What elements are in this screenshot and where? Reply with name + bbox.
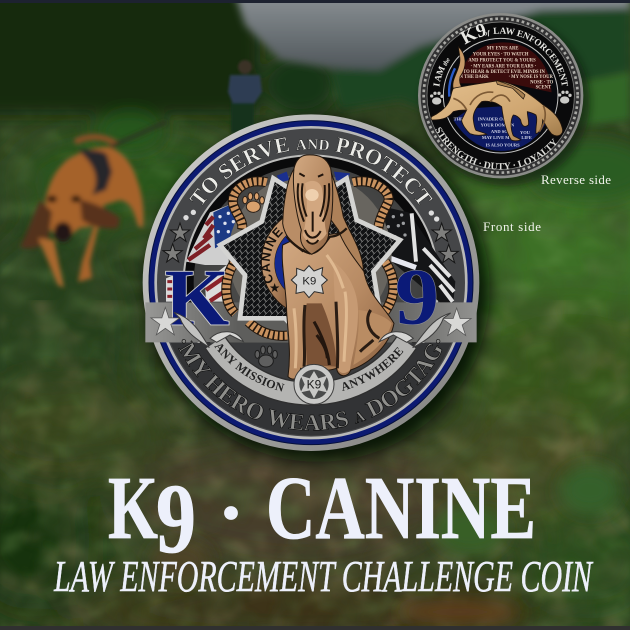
horizontal silver bar (145, 302, 477, 342)
title: k9 canine: CANINE (266, 459, 536, 558)
rope ring (226, 181, 393, 336)
poem text upper: IN THE DARK (458, 75, 489, 80)
small stars (163, 223, 458, 263)
tail (453, 47, 465, 89)
harness (496, 80, 525, 99)
poem text lower: IS ALSO YOURS (486, 142, 520, 147)
reverse motto: of: of (484, 30, 490, 36)
icon: decorative dots (183, 210, 439, 222)
ribbon: any mission anywhere (174, 312, 451, 404)
collar tag: k9: K9 (302, 275, 316, 287)
poem text upper: AND PROTECT YOU & YOURS (468, 59, 536, 64)
title: k9 canine: 9 (156, 463, 196, 574)
title: k9 canine: K (108, 459, 158, 558)
shadow under reverse coin (422, 18, 590, 186)
poem text lower: YOUR DOMAIN (481, 122, 515, 127)
flag: american (166, 202, 245, 302)
dog left ear (283, 170, 310, 252)
label: front side: Front side (483, 219, 541, 234)
dog highlights (294, 255, 346, 368)
inner grey plate (228, 173, 392, 337)
poem text lower: MAY LIVE MY (482, 135, 513, 140)
poem text lower: AND SO (491, 129, 508, 134)
reverse inner circle (443, 38, 558, 153)
poem text upper: TO HEAR & DETECT EVIL MINDS IN (463, 70, 546, 75)
icon: paw upper left (243, 193, 264, 212)
poem text lower: INVADER OF (478, 117, 506, 122)
reverse rim (418, 13, 583, 178)
blurred handler in background (228, 60, 262, 133)
body (431, 81, 563, 141)
large star right (442, 308, 471, 335)
dog foreleg right (333, 262, 358, 373)
dog face wrinkles (298, 173, 329, 244)
slogan: to serve and protect: TO SERVE AND PROTECT (189, 136, 433, 206)
poem text upper: NOSE · TO (530, 80, 554, 85)
red poem panel (460, 42, 552, 92)
poem text lower: LIFE (521, 135, 532, 140)
bloodhound statue (282, 155, 394, 379)
dog belly shadow (305, 303, 337, 367)
blue enamel behind star (277, 172, 350, 182)
dog body (282, 233, 394, 379)
reverse bloodhound (431, 47, 563, 141)
bronze arc: canine (261, 218, 290, 308)
title: k9 canine (108, 459, 536, 574)
flag: thin blue line (383, 207, 455, 302)
dog head (293, 155, 333, 254)
lower text band (171, 343, 451, 436)
dog neck fold (287, 228, 347, 253)
icon: paw lower (255, 346, 277, 367)
lower field under ribbon (210, 343, 413, 385)
medallion: k9 star: K9 (307, 378, 322, 392)
main coin: front side (142, 114, 480, 451)
ribbon: any mission anywhere: ANY MISSION (214, 344, 285, 392)
poem text lower: THE (454, 117, 463, 122)
poem text upper (458, 47, 554, 91)
blurred bloodhound in background (20, 122, 166, 288)
reverse motto: k9: K9 (459, 24, 486, 44)
large star left (151, 307, 180, 335)
dog right ear (320, 160, 363, 271)
reverse paw icons (430, 91, 572, 105)
reverse motto: i am the: I AM the (433, 58, 450, 87)
shadow under main coin (146, 118, 490, 462)
poem text upper: · MY NOSE IS YOUR (508, 75, 554, 80)
reverse rope border (424, 19, 578, 173)
slogan: my hero wears a dogtag: ·MY HERO WEARS A DOGTAG· (178, 339, 442, 431)
numeral 9: 9 (395, 253, 439, 341)
poem text upper: YOUR EYES · TO WATCH (473, 53, 529, 58)
dog haunch (353, 310, 392, 365)
poem text upper: SCENT (536, 86, 552, 91)
reverse motto: strength duty loyalty: STRENGTH · DUTY · LOYALTY (435, 127, 557, 170)
tail shadow (449, 68, 455, 97)
reverse black field (427, 22, 574, 169)
collar tag: k9 (291, 266, 327, 298)
blue enamel ring (149, 121, 473, 445)
outer silver rim (143, 114, 479, 451)
top text band (157, 129, 465, 437)
ribbon: any mission anywhere: ANYWHERE (342, 347, 404, 391)
medallion: k9 star (294, 364, 334, 404)
poem text lower: YOU (520, 130, 531, 135)
letter K: K (165, 254, 229, 342)
poem text upper: MY EYES ARE (487, 47, 518, 52)
dog muzzle (303, 181, 327, 243)
blue panel (453, 105, 547, 151)
muscle shadows (453, 92, 545, 132)
poem text lower (454, 117, 532, 147)
seven point star badge (220, 178, 400, 345)
dog nose (305, 189, 319, 201)
dog shadow lines (304, 302, 379, 368)
label: reverse side: Reverse side (541, 172, 611, 187)
reverse motto: law enforcement: LAW ENFORCEMENT (493, 28, 568, 86)
poem text upper: · MY EARS ARE YOUR EARS · (471, 65, 537, 70)
reverse coin (418, 13, 584, 178)
bronze arc: canine: CANINE (261, 227, 283, 284)
